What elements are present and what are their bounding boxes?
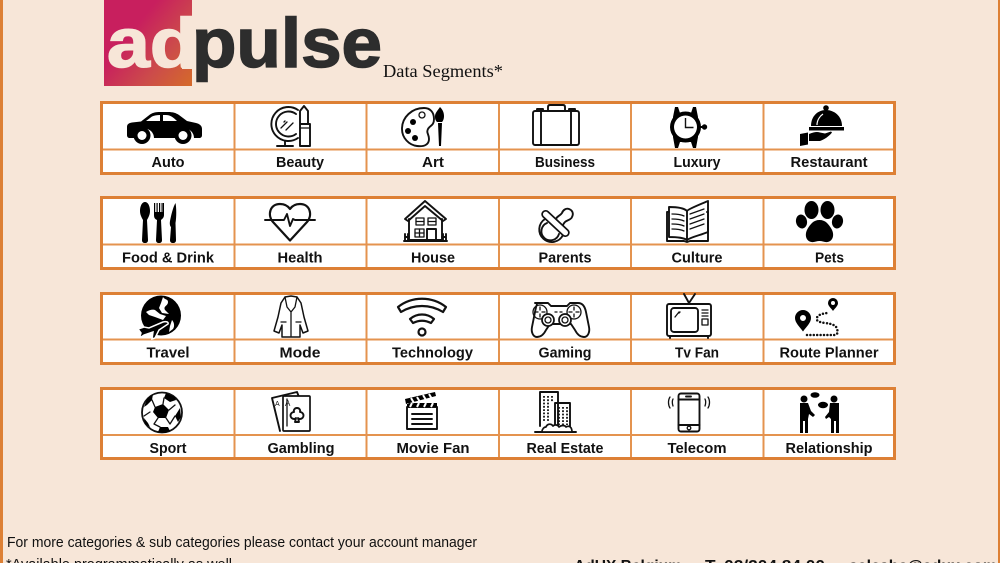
icon: food cutlery [140, 202, 176, 243]
icon: car [127, 112, 202, 144]
label: Luxury: Luxury [674, 155, 720, 171]
icon: mode coat [274, 296, 308, 337]
icon: route planner pins [795, 298, 838, 335]
label: Technology: Technology [392, 346, 473, 362]
icon: soccer ball [142, 392, 182, 433]
logo: adpulse [104, 0, 382, 86]
icon: wristwatch [670, 107, 707, 148]
heading: Data Segments: Data Segments* [383, 61, 503, 81]
label: Health: Health [278, 250, 322, 266]
icon: movie clapper [405, 392, 437, 429]
icon: gaming controller [532, 303, 589, 337]
label: Restaurant: Restaurant [790, 155, 868, 171]
icon: telecom phone [668, 394, 710, 432]
label: Pets: Pets [815, 250, 844, 266]
panel: row 2 table [101, 197, 895, 269]
icon: beauty mirror and lipstick [271, 106, 310, 146]
icon: house [404, 201, 447, 241]
label: Beauty: Beauty [276, 155, 324, 171]
icon: relationship two people talking [800, 392, 839, 433]
label: Real Estate: Real Estate [526, 441, 604, 457]
icon: wifi [398, 299, 446, 336]
icon: tv set [667, 294, 711, 338]
panel: row 4 table [101, 388, 895, 460]
label: Travel: Travel [146, 346, 190, 362]
icon: restaurant cloche [800, 105, 844, 146]
panel: row 3 table [101, 292, 895, 364]
label: House: House [411, 250, 455, 266]
label: Movie Fan: Movie Fan [396, 441, 470, 457]
label: Relationship: Relationship [786, 441, 873, 457]
logo: adpulse: pulse [192, 4, 382, 82]
icon: open book [667, 201, 708, 242]
icon: art palette [402, 107, 444, 146]
label: Auto: Auto [152, 155, 185, 171]
label: Parents: Parents [538, 250, 592, 266]
text: more categories note: For more categories & sub categories please contact your account manager [7, 535, 477, 551]
text: contact details [574, 558, 997, 563]
icon: real estate buildings [535, 392, 576, 432]
label: Culture: Culture [672, 250, 722, 266]
label: Art: Art [422, 155, 444, 171]
label: Business: Business [535, 155, 595, 171]
label: Tv Fan: Tv Fan [675, 346, 719, 362]
label: Route Planner: Route Planner [780, 346, 879, 362]
icon: paw print [795, 201, 844, 242]
icon: gambling playing cards: A [285, 399, 291, 408]
logo: adpulse: ad [107, 4, 197, 82]
label: Gaming: Gaming [538, 346, 592, 362]
label: Food & Drink: Food & Drink [122, 250, 215, 266]
icon: briefcase [533, 105, 579, 145]
icon: health heart [265, 204, 315, 240]
icon: pacifier [539, 209, 573, 242]
label: Sport: Sport [150, 441, 187, 457]
icon: gambling playing cards [272, 392, 310, 431]
icon: gambling playing cards: A [275, 401, 280, 408]
label: Telecom: Telecom [668, 441, 726, 457]
icon: travel globe and plane [138, 296, 181, 339]
label: Gambling: Gambling [268, 441, 334, 457]
label: Mode: Mode [280, 346, 320, 362]
panel: row 1 table [101, 102, 895, 174]
